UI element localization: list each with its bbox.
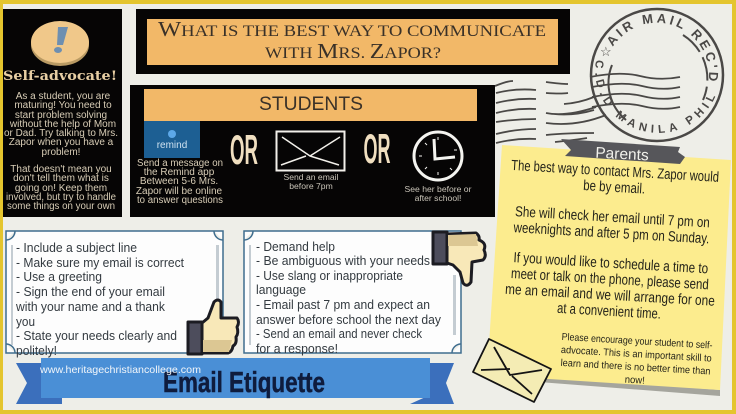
text: email instructions: before 7pm — [289, 181, 333, 191]
text: don't list: - Email past 7 pm and expect an — [256, 297, 430, 312]
icon: stamp star: ☆ — [600, 44, 612, 59]
text: self-advocate body — [4, 91, 118, 212]
text: don't list: answer before school the next day — [256, 312, 441, 327]
text: do list: with your name and a thank — [15, 299, 165, 314]
watermark url: www.heritagechristiancollege.com — [39, 364, 201, 376]
title text — [158, 17, 546, 63]
text: don't list: - Use slang or inappropriate — [256, 268, 403, 283]
text: parents small note: advocate. This is an important skill to — [561, 345, 712, 365]
icon: thumbs up — [188, 300, 238, 354]
text: do list: you — [16, 314, 35, 329]
text: remind instructions — [136, 158, 223, 206]
text: self-advocate body: without the help of Mom — [9, 119, 116, 130]
text: parents small note: learn and there is no better time than — [560, 358, 711, 377]
text: don't list: language — [256, 282, 306, 297]
text: self-advocate body: start problem solving — [15, 110, 107, 121]
icon: remind logo: remind — [157, 140, 187, 151]
text: don't list — [256, 239, 441, 356]
text: self-advocate body: That doesn't mean you — [10, 164, 112, 175]
text: clock instructions: See her before or — [405, 184, 472, 194]
text: do list: - Include a subject line — [16, 240, 137, 255]
text: don't list: - Be ambiguous with your needs — [256, 253, 430, 268]
text: do list: - State your needs clearly and — [16, 328, 177, 343]
text: parents message: be by email. — [583, 178, 646, 198]
text: remind instructions: Zapor will be online — [136, 186, 223, 197]
banner: email etiquette — [16, 358, 454, 404]
heading: self-advocate: Self-advocate! — [3, 69, 117, 84]
text: self-advocate body: maturing! You need to — [14, 100, 112, 111]
text: remind instructions: the Remind app — [144, 167, 215, 178]
panel: students — [130, 85, 495, 217]
text: do list — [15, 240, 184, 358]
panel: don't list — [244, 231, 461, 356]
icon: clock — [414, 132, 462, 180]
text: do list: politely! — [16, 343, 57, 358]
heading: email etiquette: Email Etiquette — [163, 367, 325, 399]
icon: tilted envelope — [473, 339, 551, 402]
text: parents small note: Please encourage your student to self- — [561, 332, 713, 352]
text: don't list: for a response! — [256, 341, 338, 356]
text: self-advocate body: Zapor when you have a — [9, 137, 114, 148]
text: do list: - Sign the end of your email — [16, 284, 165, 299]
panel: self-advocate — [3, 9, 122, 217]
text: self-advocate body: problem! — [42, 147, 80, 158]
text: stamp top ring: AIR MAIL REC'D — [608, 14, 718, 81]
icon: remind logo — [144, 121, 200, 158]
postmark wavy lines — [495, 74, 680, 143]
icon: thumbs down — [433, 232, 485, 285]
text: remind instructions: Send a message on — [137, 158, 223, 169]
text: clock instructions: after school! — [415, 193, 461, 203]
text: self-advocate body: As a student, you are — [16, 91, 111, 102]
text: parents message: at a convenient time. — [557, 301, 661, 323]
text: self-advocate body: involved, but try to handle — [6, 192, 116, 203]
panel: students: OR — [230, 126, 258, 173]
text: self-advocate body: or Dad. Try talking to Mrs. — [4, 128, 118, 139]
panel: title — [136, 9, 570, 74]
icon: exclamation badge — [31, 21, 89, 66]
text: email instructions — [284, 172, 339, 191]
banner: parents: Parents — [595, 145, 649, 164]
text: email instructions: Send an email — [284, 172, 339, 182]
text: parents small note: now! — [624, 375, 645, 387]
text: parents message — [503, 158, 722, 326]
text: do list: - Make sure my email is correct — [16, 255, 184, 270]
title text: WITH MRS. ZAPOR? — [265, 39, 441, 63]
text: remind instructions: Between 5-6 Mrs. — [140, 176, 218, 187]
text: parents small note — [559, 332, 713, 391]
icon: envelope — [276, 132, 344, 170]
panel: do list — [6, 231, 223, 358]
text: remind instructions: to answer questions — [137, 195, 223, 206]
text: self-advocate body: some things on your own — [7, 201, 115, 212]
text: clock instructions — [405, 184, 472, 203]
text: don't list: - Send an email and never check — [256, 326, 422, 341]
heading: students: STUDENTS — [259, 94, 363, 115]
banner: parents — [561, 139, 685, 164]
text: don't list: - Demand help — [256, 239, 335, 254]
icon: air mail stamp — [590, 8, 724, 142]
panel: parents note — [487, 139, 731, 396]
panel: students: OR — [364, 125, 390, 172]
text: self-advocate body: going on! Keep them — [15, 183, 107, 194]
text: do list: - Use a greeting — [16, 269, 102, 284]
text: self-advocate body: don't tell them what is — [13, 173, 109, 184]
title text: WHAT IS THE BEST WAY TO COMMUNICATE — [158, 17, 546, 41]
